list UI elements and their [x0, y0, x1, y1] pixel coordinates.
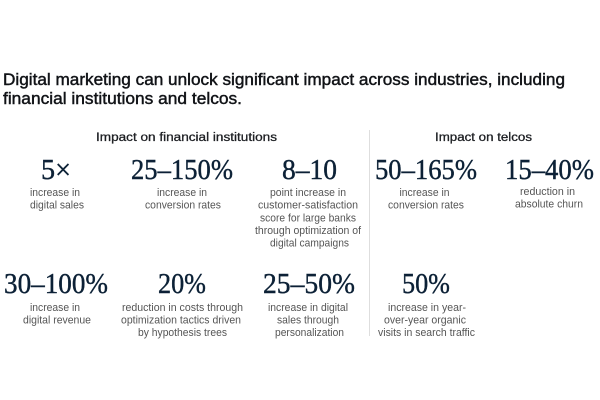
heading: impact on telcos: Impact on telcos	[435, 130, 532, 144]
stat: 25-150% conversion rates: increase in	[157, 187, 207, 199]
stat: 5x digital sales: digital sales	[30, 200, 84, 212]
stat: 8-10 point increase: through optimization of	[255, 225, 362, 237]
stat: 25-50% personalization: 25–50%	[263, 269, 355, 300]
title: Digital marketing can unlock significant impact across industries, including	[3, 71, 565, 89]
stat: 8-10 point increase	[255, 155, 362, 250]
stat: 8-10 point increase: 8–10	[282, 155, 337, 186]
stat: 30-100% digital revenue: 30–100%	[4, 269, 108, 300]
stat: 50% organic visits	[378, 269, 475, 339]
stat: 15-40% absolute churn: reduction in	[520, 186, 575, 198]
heading: impact on financial institutions: Impact on financial institutions	[96, 130, 277, 144]
stat: 5x digital sales	[30, 155, 84, 212]
title: financial institutions and telcos.	[3, 90, 242, 108]
stat: 50-165% conversion rates: conversion rates	[388, 200, 464, 212]
stat: 5x digital sales: increase in	[30, 187, 80, 199]
stat: 8-10 point increase: score for large banks	[260, 212, 356, 224]
stat: 15-40% absolute churn	[505, 155, 594, 211]
stat: 25-50% personalization: increase in digital	[268, 302, 348, 314]
stat: 50% organic visits: over-year organic	[384, 315, 466, 327]
stat: 15-40% absolute churn: 15–40%	[505, 155, 594, 186]
stat: 30-100% digital revenue	[4, 269, 108, 327]
stat: 50-165% conversion rates: 50–165%	[375, 155, 477, 186]
stat: 30-100% digital revenue: increase in	[30, 302, 80, 314]
stat: 25-50% personalization: sales through	[277, 315, 339, 327]
stat: 20% cost reduction: reduction in costs through	[122, 302, 243, 314]
stat: 20% cost reduction: 20%	[158, 269, 206, 300]
stat: 25-50% personalization	[263, 269, 355, 339]
stat: 8-10 point increase: point increase in	[270, 187, 346, 199]
stat: 20% cost reduction: by hypothesis trees	[138, 327, 227, 339]
stat: 8-10 point increase: digital campaigns	[270, 238, 349, 250]
stat: 25-150% conversion rates: 25–150%	[131, 155, 233, 186]
stat: 50-165% conversion rates: increase in	[400, 187, 450, 199]
stat: 25-150% conversion rates	[131, 155, 233, 212]
stat: 5x digital sales: 5×	[41, 155, 71, 186]
stat: 50% organic visits: visits in search traffic	[378, 327, 475, 339]
stat: 30-100% digital revenue: digital revenue	[23, 315, 91, 327]
title	[3, 71, 565, 108]
stat: 25-150% conversion rates: conversion rates	[145, 200, 221, 212]
stat: 20% cost reduction: optimization tactics driven	[121, 315, 241, 327]
stat: 50% organic visits: increase in year-	[388, 302, 466, 314]
stat: 8-10 point increase: customer-satisfaction	[258, 200, 358, 212]
stat: 15-40% absolute churn: absolute churn	[515, 199, 583, 211]
stat: 50-165% conversion rates	[375, 155, 477, 212]
stat: 20% cost reduction	[121, 269, 243, 339]
stat: 25-50% personalization: personalization	[275, 327, 344, 339]
stat: 50% organic visits: 50%	[402, 269, 450, 300]
